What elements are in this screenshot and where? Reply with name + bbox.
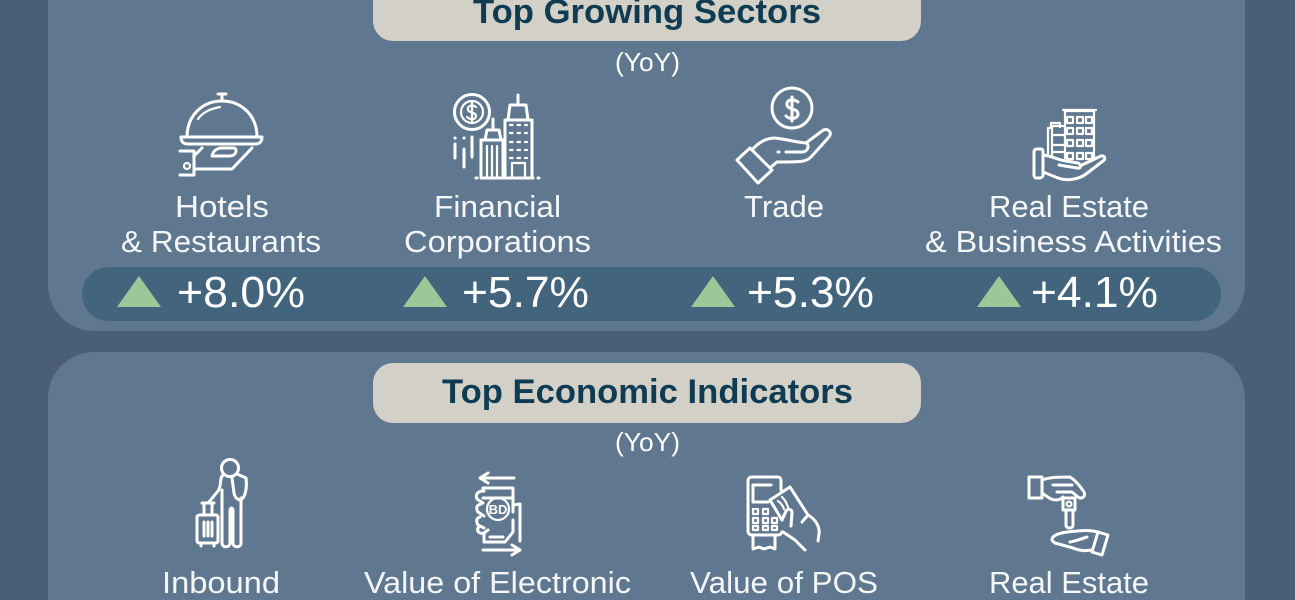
heading pill: top growing sectors [373,0,921,41]
icon: hand holding building [1034,110,1105,180]
label: financial corporations [404,189,591,259]
icon: serving cloche on hand [180,94,262,175]
icon: hand with dollar coin [737,88,830,183]
value: real estate plus 4.1 percent: +4.1% [1031,268,1158,317]
value: trade plus 5.3 percent [691,268,874,317]
label: inbound: Inbound [162,565,280,600]
value: financial plus 5.7 percent: +5.7% [462,268,589,317]
label: real estate and business activities: Real Estate [989,189,1149,224]
icon: handing over keys [1029,477,1108,555]
icon: mobile payment with BD coin: BD [489,502,507,517]
heading pill: top economic indicators [373,363,921,423]
value: trade plus 5.3 percent: +5.3% [747,268,874,317]
label: real estate and business activities [925,189,1222,259]
label: hotels and restaurants: Hotels [175,189,269,224]
growth values bar [82,267,1221,321]
label: financial corporations: Corporations [404,224,591,259]
label: hotels and restaurants: & Restaurants [121,224,321,259]
label: value of POS: Value of POS [690,565,878,600]
text: YoY note: (YoY) [615,427,680,457]
value: real estate plus 4.1 percent [977,268,1158,317]
label: value of electronic: Value of Electronic [364,565,631,600]
label: real estate: Real Estate [989,565,1149,600]
text: YoY note: (YoY) [615,47,680,77]
value: financial plus 5.7 percent [403,268,589,317]
value: hotels plus 8.0 percent: +8.0% [177,268,305,317]
label: financial corporations: Financial [434,189,561,224]
icon: mobile payment with BD coin [476,473,520,555]
icon: card payment terminal [748,477,819,550]
heading pill: top economic indicators: Top Economic Indicators [442,373,853,411]
icon: traveller with suitcase [197,460,246,547]
icon: coin and skyscrapers [454,94,539,178]
label: real estate and business activities: & Business Activities [925,224,1222,259]
panel: top economic indicators [48,352,1245,600]
label: hotels and restaurants [121,189,321,259]
label: trade: Trade [744,189,824,224]
value: hotels plus 8.0 percent [117,268,305,317]
panel: top growing sectors [48,0,1245,331]
